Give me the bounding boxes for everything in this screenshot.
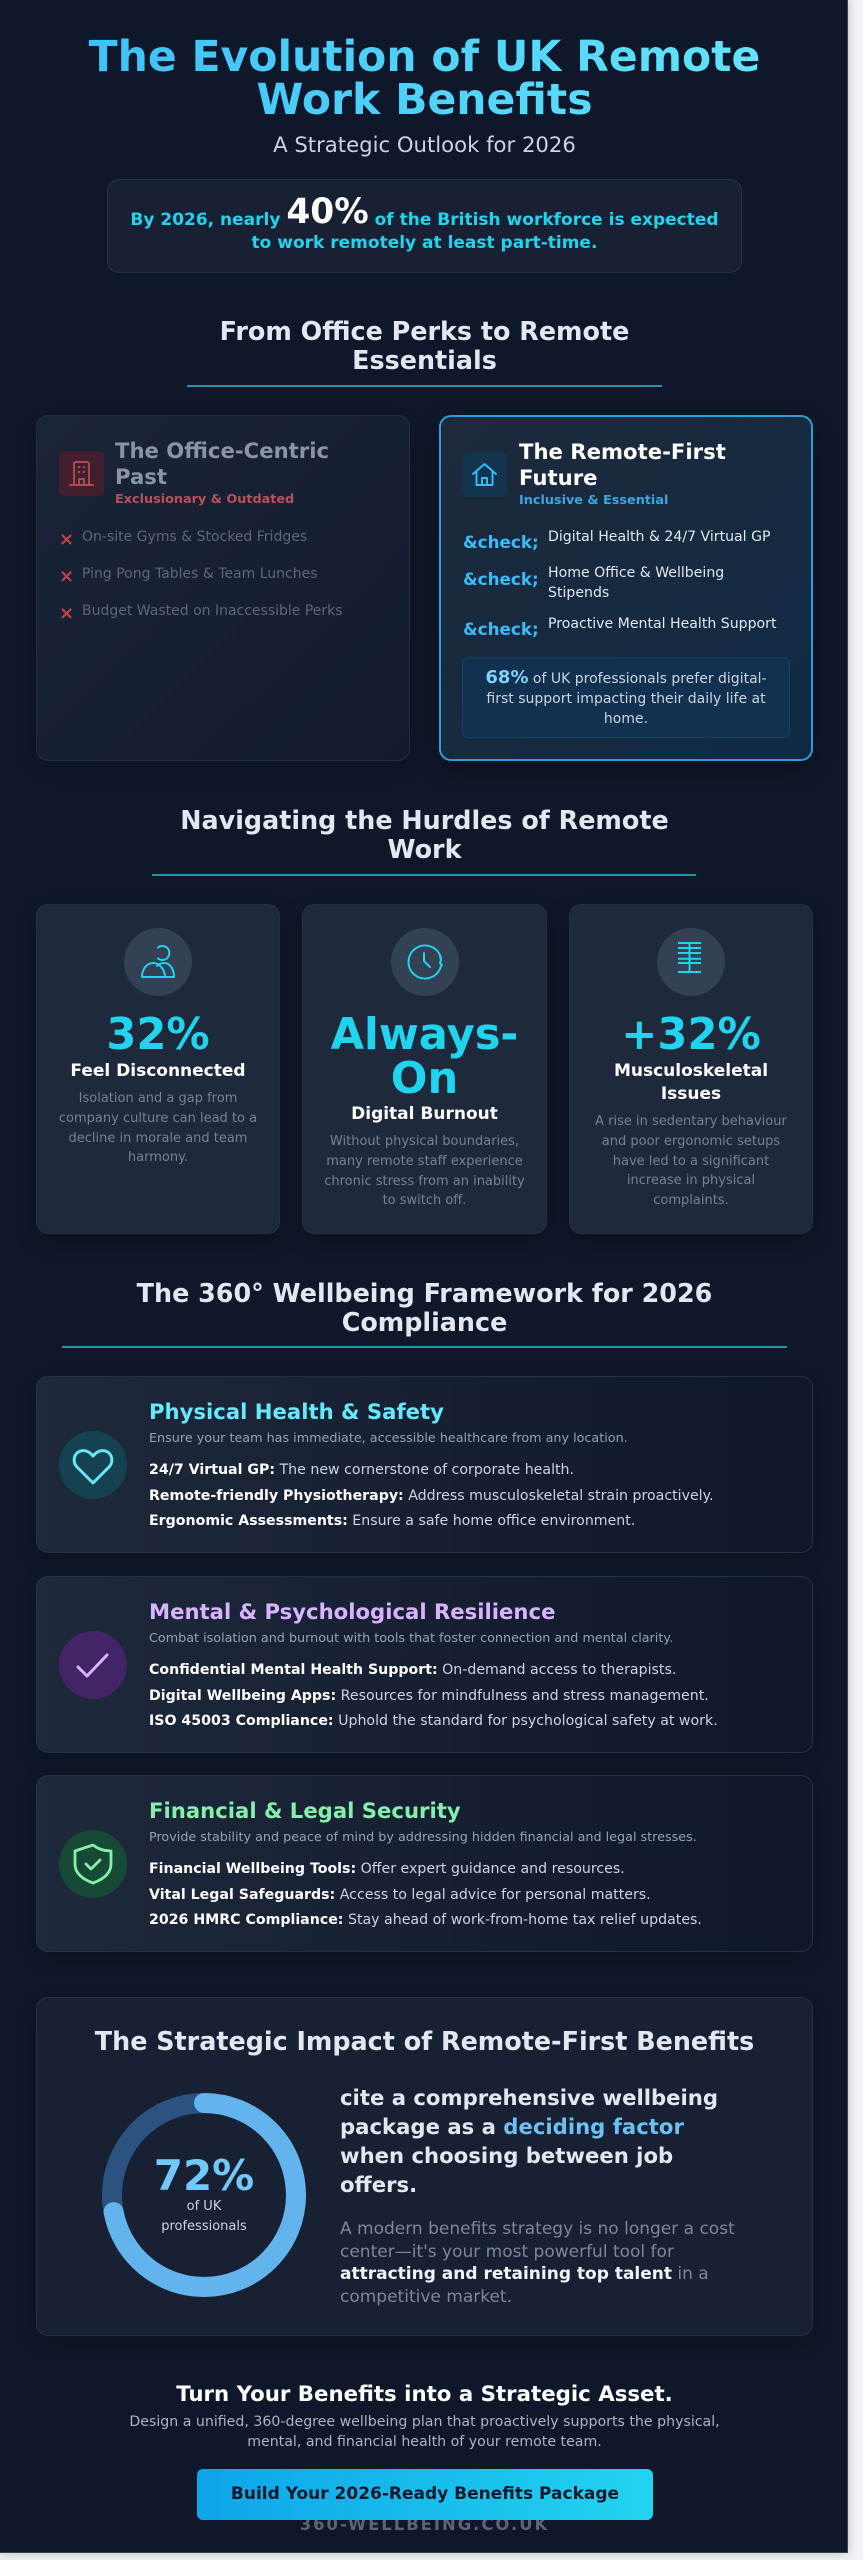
donut caption: of UK — [187, 2199, 221, 2214]
heading: office perks: Essentials — [352, 344, 497, 374]
impact paragraph: attracting and retaining top talent in a — [340, 2264, 709, 2284]
check label: &check; — [463, 619, 539, 639]
call to action heading: Turn Your Benefits into a Strategic Asset. — [176, 2382, 673, 2407]
donut caption — [161, 2199, 247, 2234]
check label: &check; — [463, 532, 539, 552]
stat text — [485, 667, 767, 727]
icon: spine — [657, 928, 725, 996]
stat label: Feel Disconnected — [70, 1061, 246, 1081]
impact paragraph: competitive market. — [340, 2286, 512, 2306]
list item: Financial Wellbeing Tools: Offer expert guidance and resources. — [149, 1861, 625, 1877]
stat text: 68% of UK professionals prefer digital- — [485, 667, 767, 688]
stat value — [330, 1010, 518, 1104]
card subtitle: Ensure your team has immediate, accessible healthcare from any location. — [149, 1431, 628, 1446]
heading: office perks — [220, 316, 629, 374]
stat text: first support impacting their daily life at — [486, 691, 766, 707]
impact statement: when choosing between job — [340, 2142, 673, 2168]
list item — [59, 529, 307, 550]
stat description: A rise in sedentary behaviour — [595, 1114, 787, 1129]
stat description — [595, 1114, 787, 1208]
list: remote essentials — [463, 529, 776, 639]
call to action text — [129, 2414, 720, 2450]
panel tag: Inclusive & Essential — [519, 493, 668, 508]
stat value: +32% — [621, 1010, 761, 1060]
stat label: Digital Burnout — [351, 1104, 498, 1124]
impact statement: package as a deciding factor — [340, 2114, 684, 2138]
framework card: financial — [36, 1775, 813, 1952]
icon: house — [462, 452, 507, 497]
list item: Remote-friendly Physiotherapy: Address musculoskeletal strain proactively. — [149, 1488, 713, 1504]
stat description: harmony. — [128, 1150, 188, 1165]
list item: Ping Pong Tables & Team Lunches — [82, 566, 318, 582]
list item: Confidential Mental Health Support: On-demand access to therapists. — [149, 1662, 676, 1678]
heading: hurdles: Work — [388, 834, 461, 864]
card subtitle: Provide stability and peace of mind by addressing hidden financial and legal stresses. — [149, 1830, 697, 1845]
panel tag: Exclusionary & Outdated — [115, 492, 294, 507]
stat description: and poor ergonomic setups — [602, 1134, 780, 1149]
stat description: have led to a significant — [613, 1154, 769, 1169]
heading: hurdles: Navigating the Hurdles of Remote — [180, 805, 669, 835]
card list — [149, 1861, 702, 1928]
stat description: decline in morale and team — [69, 1131, 247, 1146]
stat card: disconnected — [36, 904, 280, 1234]
panel heading: The Strategic Impact of Remote-First Benefits — [95, 2026, 754, 2056]
callout text: to work remotely at least part-time. — [252, 233, 597, 253]
heading: framework — [136, 1278, 712, 1336]
heading: framework: Compliance — [342, 1306, 507, 1336]
stat value: Always- — [331, 1010, 518, 1060]
button — [197, 2469, 653, 2520]
stat description: increase in physical — [627, 1173, 755, 1188]
impact paragraph: A modern benefits strategy is no longer a cost — [340, 2219, 735, 2239]
stat value: 32% — [106, 1010, 210, 1060]
donut chart: 72% — [102, 2093, 306, 2297]
footer brand: 360-WELLBEING.CO.UK — [300, 2515, 549, 2534]
button: Build Your 2026-Ready Benefits Package — [231, 2484, 619, 2504]
donut value: 72% — [154, 2151, 254, 2200]
list item: Digital Wellbeing Apps: Resources for mindfulness and stress management. — [149, 1688, 709, 1704]
framework card: mental — [36, 1576, 813, 1753]
list item: Budget Wasted on Inaccessible Perks — [82, 603, 343, 619]
stat label: Issues — [661, 1084, 721, 1104]
title — [0, 36, 849, 122]
call to action text: Design a unified, 360-degree wellbeing plan that proactively supports the physical, — [129, 2414, 720, 2430]
stat description: to switch off. — [383, 1193, 466, 1208]
stat description: Isolation and a gap from — [79, 1091, 237, 1106]
panel heading — [115, 438, 329, 488]
impact paragraph — [340, 2219, 735, 2306]
panel heading: Past — [115, 464, 167, 488]
framework card: physical — [36, 1376, 813, 1553]
list item: ISO 45003 Compliance: Uphold the standard for psychological safety at work. — [149, 1712, 718, 1728]
list item: Home Office & Wellbeing — [548, 565, 724, 581]
impact statement — [340, 2084, 718, 2196]
panel heading: The Remote-First — [519, 439, 726, 464]
list item: × — [59, 566, 74, 587]
stat description: Without physical boundaries, — [330, 1134, 519, 1149]
stat description: many remote staff experience — [326, 1154, 523, 1169]
list item: 2026 HMRC Compliance: Stay ahead of work-from-home tax relief updates. — [149, 1912, 702, 1928]
callout text: By 2026, nearly 40% of the British workforce is expected — [130, 192, 719, 232]
call to action text: mental, and financial health of your remote team. — [247, 2434, 602, 2450]
list item: Stipends — [548, 585, 609, 601]
list item: Digital Health & 24/7 Virtual GP — [548, 529, 770, 545]
icon: building — [59, 451, 104, 496]
stat description: complaints. — [653, 1193, 729, 1208]
icon: clock — [391, 928, 459, 996]
icon: shield — [59, 1830, 127, 1898]
heading: office perks: From Office Perks to Remote — [220, 316, 629, 346]
panel: office-centric past — [36, 415, 410, 761]
heading: hurdles — [180, 805, 669, 864]
card title: Mental & Psychological Resilience — [149, 1599, 555, 1624]
list: old perks — [59, 529, 343, 624]
check label: &check; — [463, 569, 539, 589]
callout text — [130, 192, 719, 253]
list item: 24/7 Virtual GP: The new cornerstone of corporate health. — [149, 1462, 574, 1478]
stat description — [324, 1134, 525, 1208]
heading: framework: The 360° Wellbeing Framework for 2026 — [137, 1278, 712, 1308]
list item: On-site Gyms & Stocked Fridges — [82, 529, 307, 545]
impact statement: offers. — [340, 2172, 417, 2196]
callout: 40% statistic — [107, 179, 742, 273]
list item: × — [59, 529, 74, 550]
card title: Financial & Legal Security — [149, 1798, 461, 1823]
stat box: 68% — [462, 657, 790, 738]
icon: heart — [59, 1431, 127, 1499]
card list — [149, 1462, 713, 1528]
impact paragraph: center—it's your most powerful tool for — [340, 2242, 674, 2262]
title: The Evolution of UK Remote — [89, 33, 760, 82]
subtitle: A Strategic Outlook for 2026 — [273, 132, 576, 157]
list item: × — [59, 603, 74, 624]
list item — [548, 565, 724, 601]
stat description: company culture can lead to a — [59, 1111, 257, 1126]
card subtitle: Combat isolation and burnout with tools that foster connection and mental clarity. — [149, 1631, 673, 1646]
card list — [149, 1662, 718, 1728]
panel heading: The Office-Centric — [115, 438, 329, 463]
list item: Proactive Mental Health Support — [548, 616, 776, 632]
stat value: On — [391, 1054, 458, 1104]
stat description: chronic stress from an inability — [324, 1174, 525, 1189]
list item — [59, 566, 318, 587]
panel: strategic impact — [36, 1997, 813, 2336]
panel: remote-first future — [439, 415, 813, 761]
stat card: burnout — [302, 904, 547, 1234]
impact statement: cite a comprehensive wellbeing — [340, 2084, 718, 2110]
card title: Physical Health & Safety — [149, 1399, 444, 1424]
list item: Ergonomic Assessments: Ensure a safe home office environment. — [149, 1512, 635, 1528]
stat description — [59, 1091, 257, 1165]
panel heading — [519, 439, 726, 490]
stat text: home. — [604, 711, 648, 727]
icon: check — [59, 1631, 127, 1699]
panel heading: Future — [519, 464, 598, 490]
icon: person — [124, 928, 192, 996]
list item: Vital Legal Safeguards: Access to legal advice for personal matters. — [149, 1886, 651, 1902]
donut caption: professionals — [161, 2219, 247, 2234]
stat label — [614, 1061, 768, 1104]
title: Work Benefits — [256, 76, 592, 125]
stat label: Musculoskeletal — [614, 1061, 768, 1081]
stat card: musculoskeletal — [569, 904, 813, 1234]
